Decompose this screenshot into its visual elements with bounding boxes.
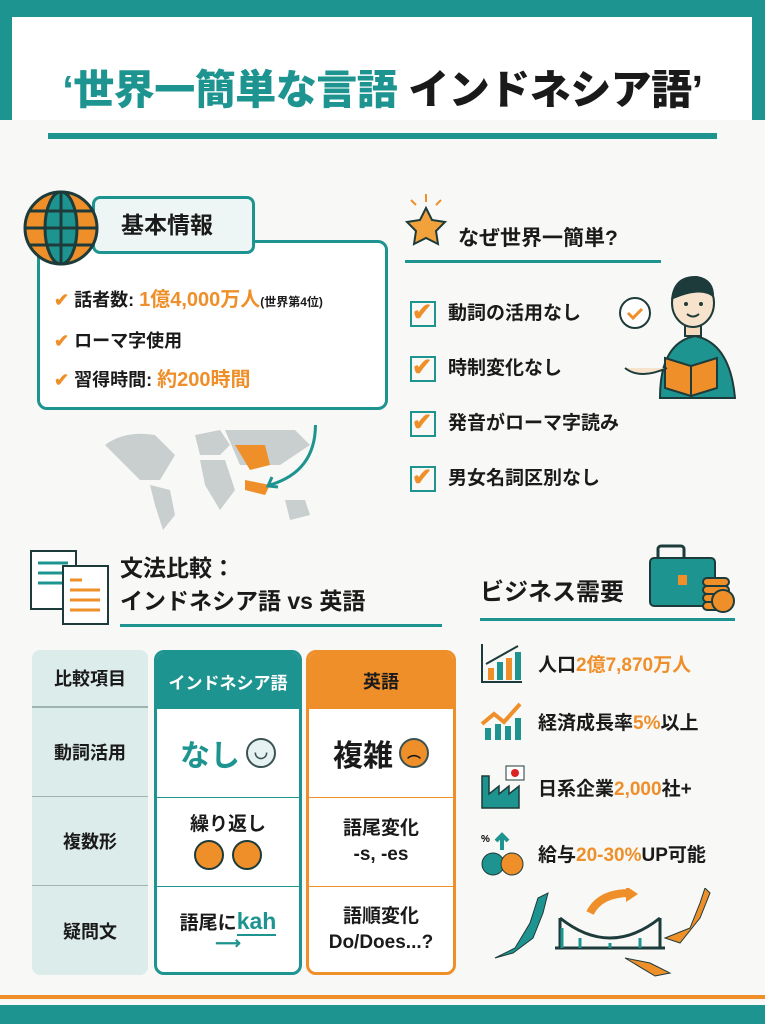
checklist: 発音がローマ字読み xyxy=(448,413,619,434)
icon: briefcase xyxy=(649,544,735,613)
panel: basic info xyxy=(37,240,388,410)
column: english: 英語 xyxy=(363,672,399,692)
column: indonesian: なし xyxy=(180,740,240,773)
heading: grammar comparison: 文法比較： xyxy=(120,555,235,581)
stat: growth xyxy=(480,702,698,740)
column: english: -s, -es xyxy=(354,844,408,865)
info items xyxy=(54,289,323,391)
checklist: ✔ xyxy=(412,409,432,436)
column: items: 複数形 xyxy=(63,832,117,852)
checklist: ✔ xyxy=(412,354,432,381)
stat: salary xyxy=(481,832,706,876)
checklist: ✔ xyxy=(412,299,432,326)
info items: ✔ ローマ字使用 xyxy=(54,331,182,351)
column: english: ︵ xyxy=(407,745,421,761)
heading: grammar comparison: インドネシア語 vs 英語 xyxy=(120,588,365,614)
stat: population: 人口2億7,870万人 xyxy=(538,654,691,676)
stat: population xyxy=(481,644,691,683)
footer bands xyxy=(0,995,765,999)
column: english: 語尾変化 xyxy=(343,818,419,839)
stat: salary: % xyxy=(481,834,490,845)
icon: star xyxy=(405,194,447,246)
checklist: 動詞の活用なし xyxy=(448,303,581,324)
business stats xyxy=(480,644,706,876)
stat: growth: 経済成長率5%以上 xyxy=(538,712,698,734)
heading: why easiest: なぜ世界一簡単? xyxy=(458,227,618,250)
checklist: 時制変化なし xyxy=(448,358,562,379)
column: items: 疑問文 xyxy=(63,922,117,942)
column: english: 語順変化 xyxy=(343,906,419,926)
column: indonesian: インドネシア語 xyxy=(168,674,288,692)
title: ‘世界一簡単な言語 インドネシア語’ xyxy=(62,67,703,113)
heading: basic info xyxy=(92,196,255,254)
column: items xyxy=(32,650,148,975)
column: indonesian: ⟶ xyxy=(215,933,241,953)
column: items: 比較項目 xyxy=(54,669,126,689)
column: indonesian: 繰り返し xyxy=(190,814,266,834)
heading: business demand: ビジネス需要 xyxy=(480,579,624,606)
column: indonesian: ◡ xyxy=(254,744,268,761)
column: english: 複雑 xyxy=(333,740,393,773)
stat: japanese companies: 日系企業2,000社+ xyxy=(538,778,692,800)
bridge map illustration xyxy=(494,888,711,976)
frame top band xyxy=(0,0,765,17)
info items: ✔ 話者数: 1億4,000万人(世界第4位) xyxy=(54,289,323,311)
checklist: ✔ xyxy=(412,464,432,491)
heading: basic info: 基本情報 xyxy=(121,212,213,238)
column: indonesian xyxy=(154,650,302,975)
stat: japanese companies xyxy=(481,766,692,809)
person illustration xyxy=(619,276,736,399)
column: items: 動詞活用 xyxy=(54,743,126,763)
column: indonesian: 語尾にkah xyxy=(180,908,276,934)
heading: grammar comparison xyxy=(120,555,365,614)
column: english: Do/Does...? xyxy=(329,932,433,952)
icon: documents xyxy=(30,550,109,625)
world map xyxy=(105,425,317,530)
info items: ✔ 習得時間: 約200時間 xyxy=(54,369,250,391)
stat: salary: 給与20-30%UP可能 xyxy=(538,844,706,866)
checklist xyxy=(410,299,619,492)
column: english xyxy=(306,650,456,975)
checklist: 男女名詞区別なし xyxy=(448,468,600,489)
comparison table xyxy=(32,650,456,975)
icon: globe xyxy=(24,190,98,266)
